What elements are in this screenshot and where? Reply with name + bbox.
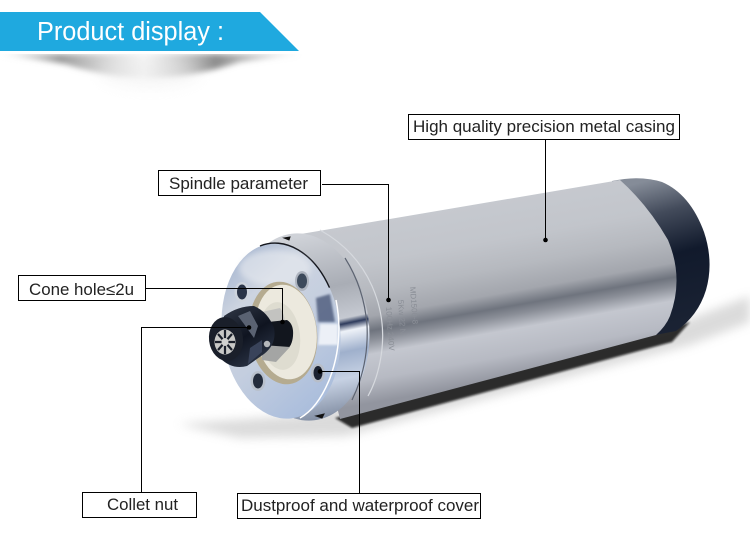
callout: spindle parameter [158, 170, 391, 302]
callout: dustproof cover [238, 369, 480, 518]
callout: precision metal casing: High quality precision metal casing [413, 118, 675, 136]
white seal [250, 281, 322, 383]
end cap [612, 178, 710, 336]
casing bevel [320, 230, 383, 396]
collar notches [284, 237, 324, 418]
engraved spec text: MD1500-8 [408, 287, 420, 325]
banner shadow [0, 51, 302, 86]
callout: precision metal casing [408, 114, 680, 242]
flange top arc [260, 243, 330, 288]
bearing seat [243, 278, 323, 388]
engraved spec text [384, 287, 420, 352]
ground shadow [178, 296, 750, 438]
callout: cone hole: Cone hole≤2u [29, 281, 134, 299]
section banner [0, 12, 302, 86]
flange right rim highlight [300, 300, 339, 418]
callout: spindle parameter: Spindle parameter [169, 175, 309, 193]
collar band [226, 226, 380, 428]
engraved spec text: 5Kw 22 N [396, 300, 407, 335]
flange face [212, 236, 350, 426]
shaft [262, 308, 293, 362]
callout: collet nut: Collet nut [107, 496, 178, 514]
callout: collet nut [82, 325, 251, 518]
seal inner shade [256, 300, 304, 372]
collet nut [206, 306, 275, 367]
banner ribbon [0, 12, 299, 51]
callout: dustproof cover: Dustproof and waterproof cover [241, 497, 480, 515]
callout: cone hole [18, 276, 285, 324]
banner heading: Product display : [37, 18, 224, 46]
metal casing [295, 180, 677, 419]
bolts [234, 271, 325, 391]
collar edge line [345, 258, 367, 400]
face reflections [316, 294, 338, 345]
face highlight [239, 250, 311, 286]
spindle motor photo [178, 178, 750, 438]
engraved spec text: 100Hz 240V [384, 307, 396, 352]
